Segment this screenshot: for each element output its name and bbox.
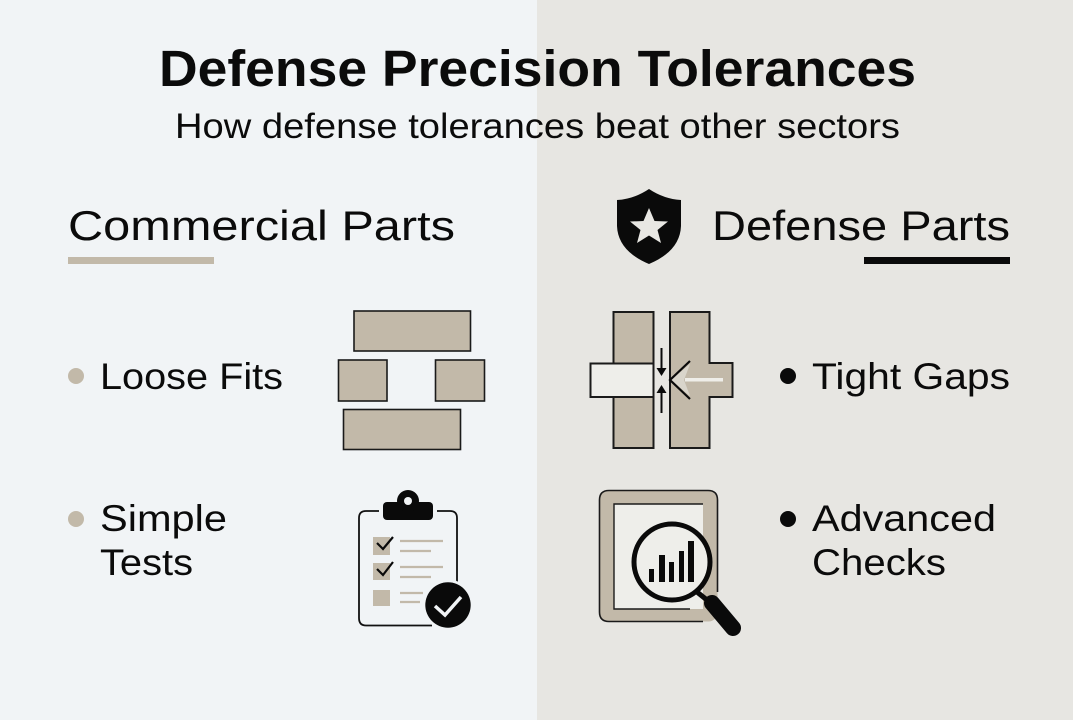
icon: loose fitting blocks bbox=[338, 311, 484, 450]
heading: defense parts: Defense Parts bbox=[712, 202, 1010, 249]
title: Defense Precision Tolerances bbox=[159, 40, 916, 97]
bullet: simple tests: Simple bbox=[100, 498, 227, 539]
bullet: tight gaps: Tight Gaps bbox=[812, 356, 1010, 397]
bullet: advanced checks: Advanced bbox=[812, 498, 996, 539]
panel: defense background bbox=[537, 0, 1073, 720]
panel: commercial parts bbox=[68, 202, 484, 630]
bullet: loose fits: Loose Fits bbox=[100, 356, 283, 397]
panel: defense parts bbox=[590, 189, 1010, 628]
bullet: advanced checks: Checks bbox=[812, 542, 946, 583]
icon: magnifier over inspection frame bbox=[600, 490, 733, 628]
panel: commercial background bbox=[0, 0, 537, 720]
heading: commercial parts: Commercial Parts bbox=[68, 202, 455, 249]
icon: tight gap cross-section bbox=[590, 312, 732, 448]
icon: shield with star bbox=[617, 189, 681, 264]
bullet: simple tests: Tests bbox=[100, 542, 193, 583]
heading underline: defense bbox=[864, 257, 1010, 264]
bullet: advanced checks bbox=[780, 498, 996, 583]
icon: clipboard checklist bbox=[359, 490, 474, 630]
heading underline: commercial bbox=[68, 257, 214, 264]
bullet: simple tests bbox=[68, 498, 227, 583]
subtitle: How defense tolerances beat other sectors bbox=[175, 107, 900, 146]
